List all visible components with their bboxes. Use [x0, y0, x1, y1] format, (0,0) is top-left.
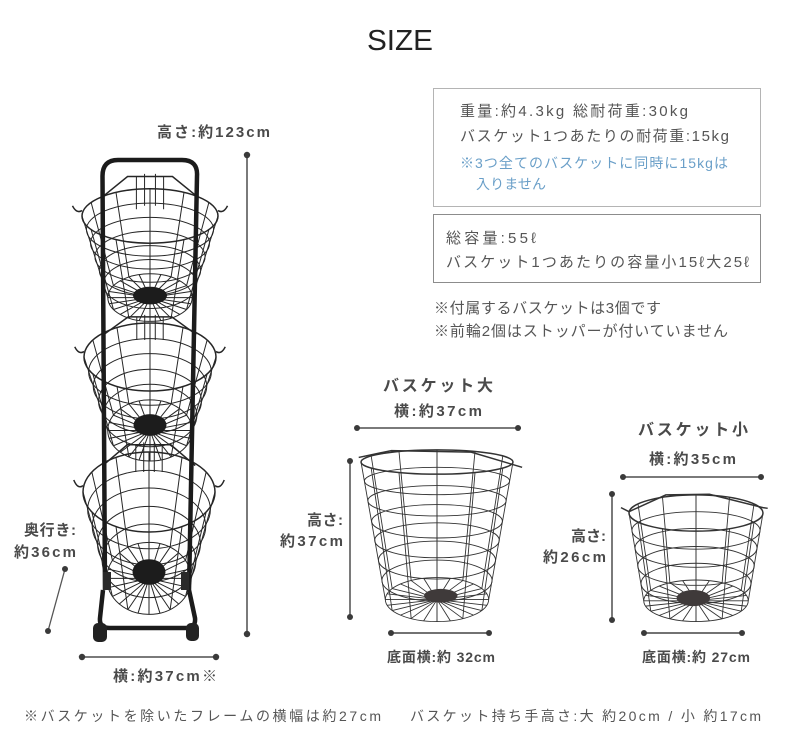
- weight warning note: [460, 155, 728, 192]
- notes: ※前輪2個はストッパーが付いていません: [434, 323, 728, 340]
- rack with three baskets: [72, 160, 228, 642]
- depth label: 約36cm: [14, 544, 76, 561]
- small basket height label: 高さ:: [571, 528, 606, 545]
- width label: 横:約37cm※: [113, 668, 217, 685]
- depth label: 奥行き:: [24, 522, 76, 539]
- notes: ※付属するバスケットは3個です: [434, 300, 661, 317]
- width dimension line: [79, 654, 219, 660]
- panel: capacity: [434, 214, 760, 282]
- rack frame: [100, 160, 197, 628]
- large basket height label: 高さ:: [307, 512, 343, 529]
- footnote: frame width: ※バスケットを除いたフレームの横幅は約27cm: [24, 708, 381, 724]
- large basket base line: [388, 630, 492, 636]
- panel: weight: 重量:約4.3kg 総耐荷重:30kg: [460, 103, 688, 120]
- large basket width line: [354, 425, 521, 431]
- height label: 高さ:約123cm: [157, 124, 270, 141]
- left wheel: [93, 623, 107, 642]
- height dimension line: [244, 152, 250, 637]
- frame joints: [103, 572, 189, 590]
- icon: large basket: [359, 450, 522, 622]
- small basket height line: [609, 491, 615, 623]
- panel: weight: [434, 88, 760, 206]
- large basket base label: 底面横:約 32cm: [387, 649, 495, 665]
- weight warning note: 入りません: [476, 176, 546, 192]
- panel: capacity: バスケット1つあたりの容量小15ℓ大25ℓ: [446, 254, 749, 271]
- large basket height label: [280, 512, 343, 550]
- footnote: handle height: バスケット持ち手高さ:大 約20cm / 小 約17cm: [410, 708, 761, 724]
- notes: [434, 300, 728, 340]
- depth dimension line: [45, 566, 68, 634]
- panel: capacity: 総容量:55ℓ: [446, 230, 536, 247]
- small basket width label: 横:約35cm: [649, 451, 736, 468]
- large basket heading: バスケット大: [383, 377, 493, 395]
- bottom basket: [74, 442, 224, 614]
- large basket width label: 横:約37cm: [394, 403, 482, 420]
- icon: small basket: [621, 494, 768, 622]
- small basket width line: [620, 474, 764, 480]
- large basket height line: [347, 458, 353, 620]
- large basket height label: 約37cm: [280, 533, 343, 550]
- small basket height label: 約26cm: [543, 549, 606, 566]
- weight warning note: ※3つ全てのバスケットに同時に15kgは: [460, 155, 728, 171]
- panel: weight: バスケット1つあたりの耐荷重:15kg: [460, 128, 729, 145]
- small basket base line: [641, 630, 745, 636]
- top basket: [72, 174, 228, 321]
- title: SIZE: [367, 25, 433, 57]
- depth label: [14, 522, 76, 561]
- middle basket: [75, 315, 225, 461]
- right wheel: [186, 623, 199, 641]
- small basket heading: バスケット小: [638, 421, 748, 439]
- small basket height label: [543, 528, 606, 566]
- small basket base label: 底面横:約 27cm: [642, 649, 750, 665]
